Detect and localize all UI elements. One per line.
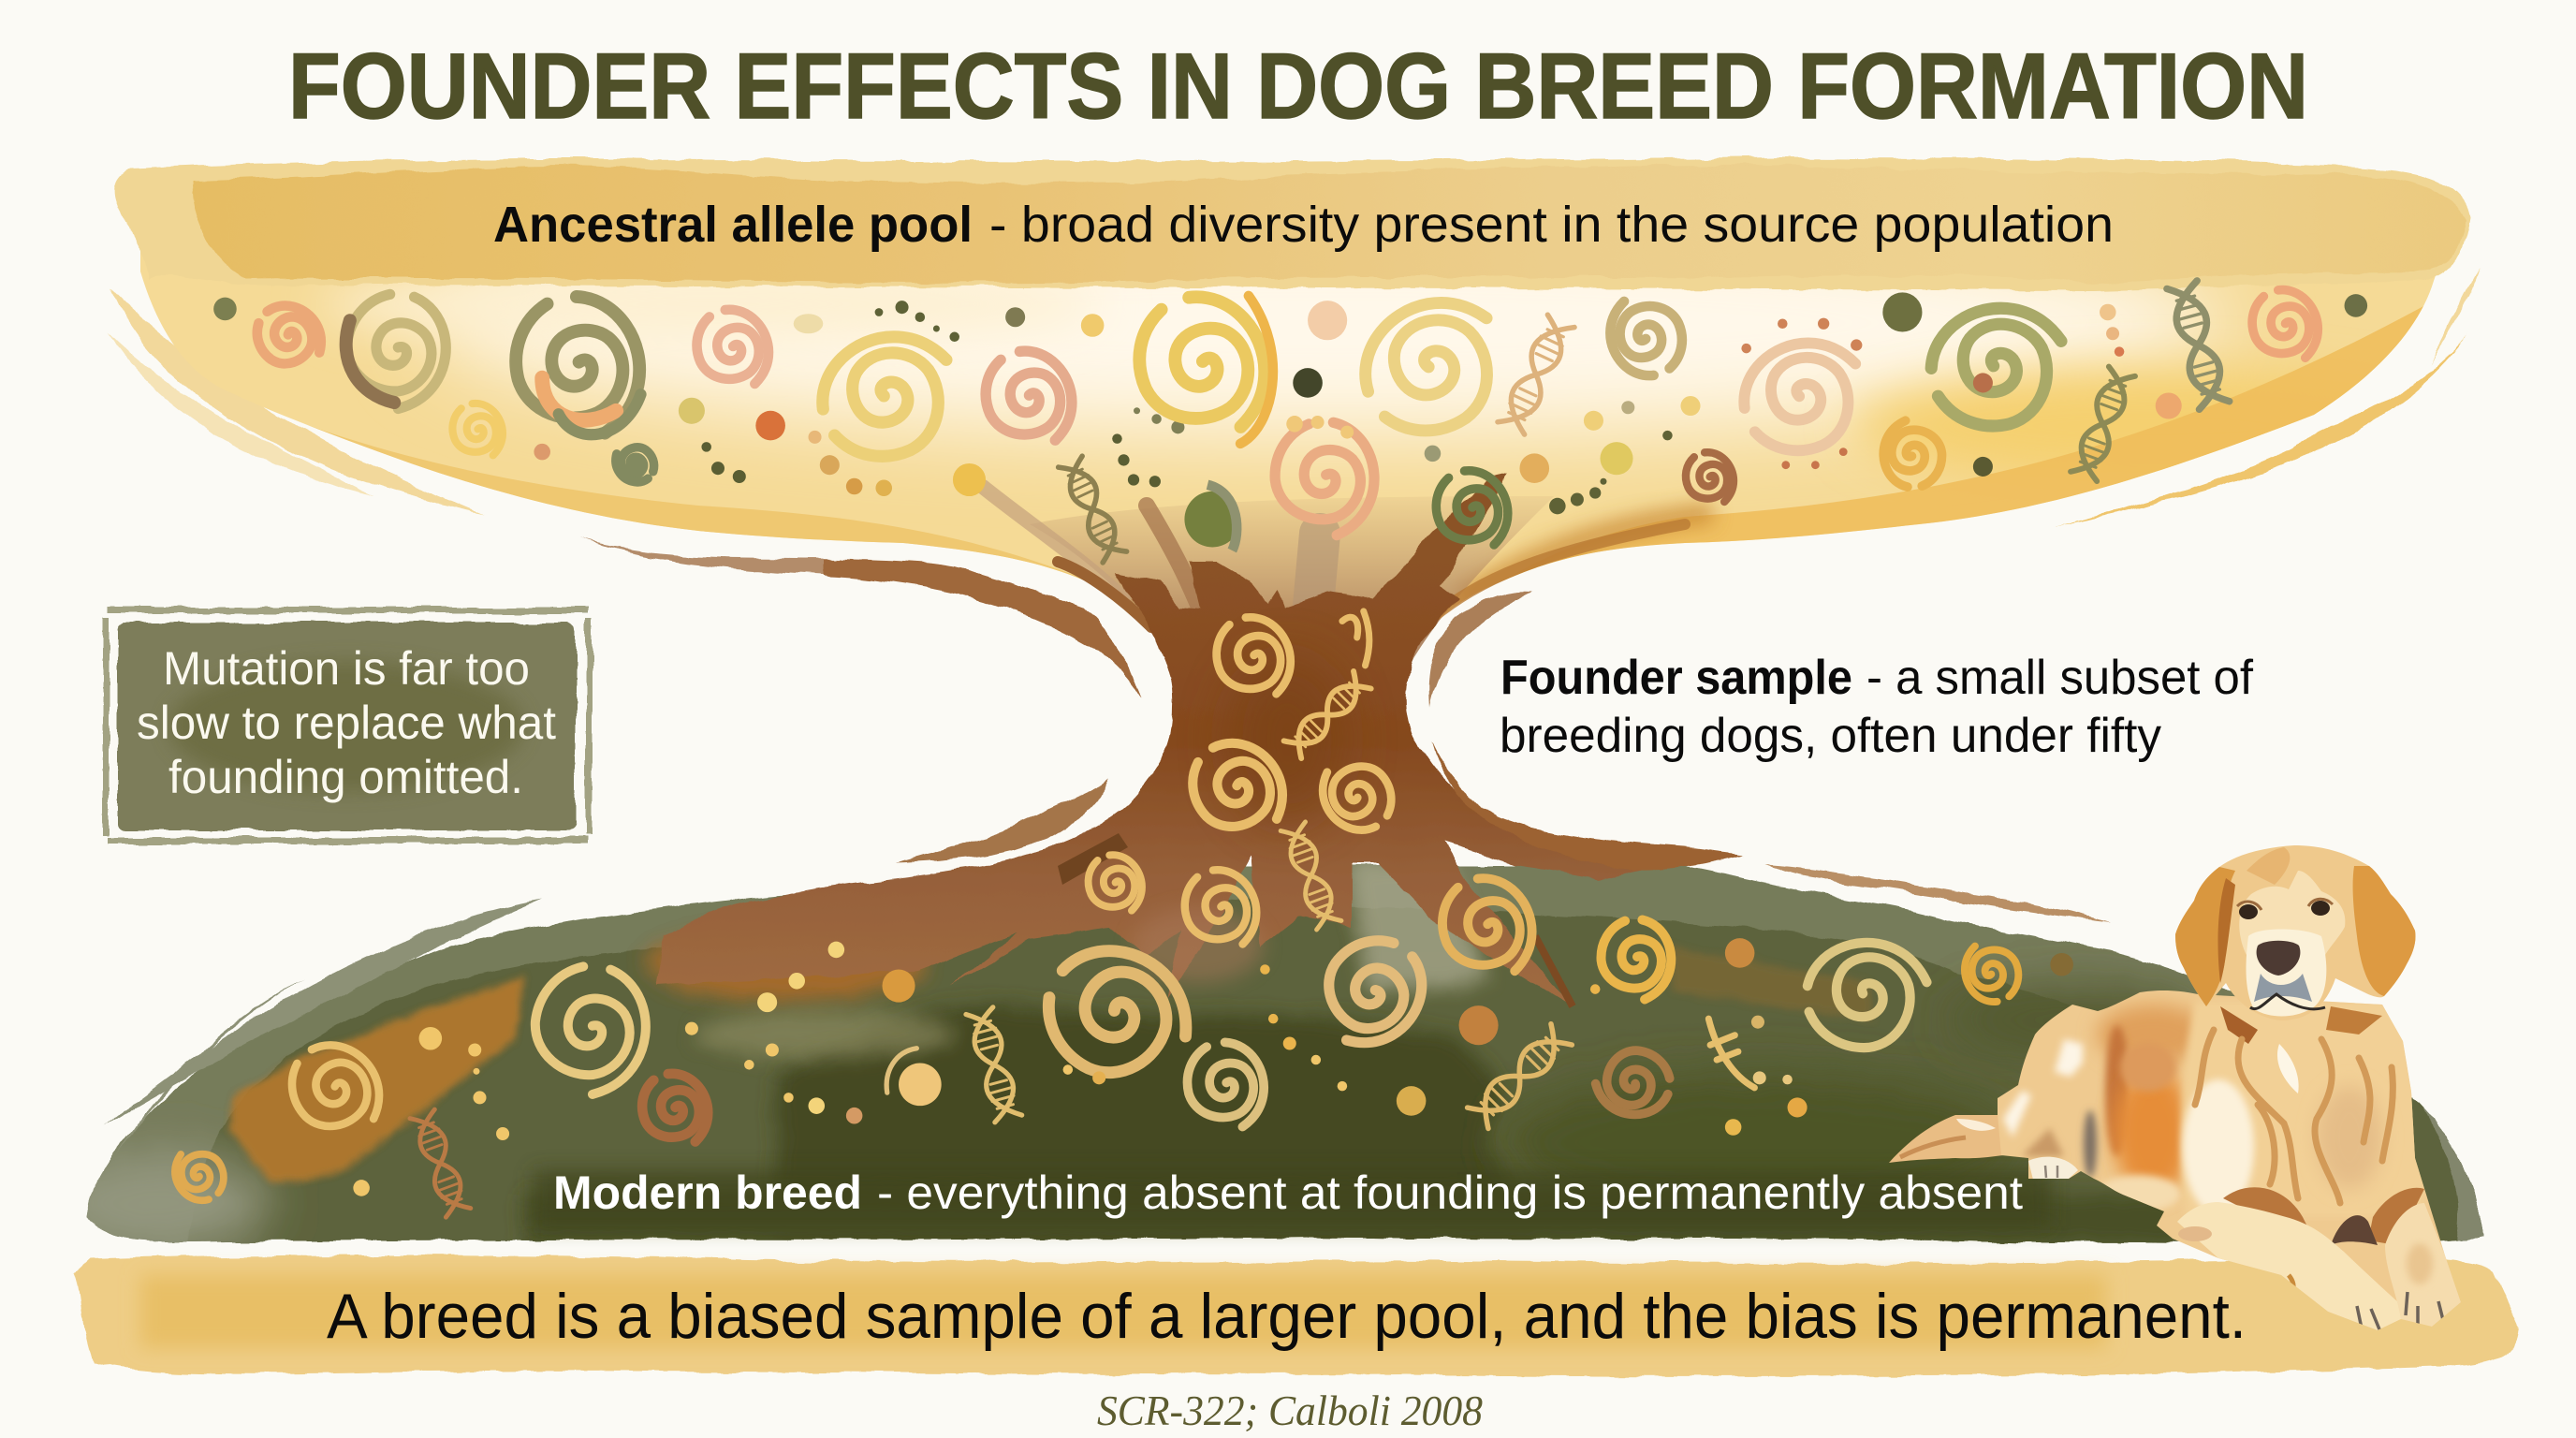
- top band outer pale wash: [114, 157, 2470, 290]
- text: founder sample: - a small subset of: [1866, 651, 2254, 705]
- dark inner wash: [777, 1005, 1535, 1245]
- between-leg shadows: [2223, 1187, 2312, 1236]
- panel: bottom takeaway band: [74, 1255, 2520, 1376]
- heading: ancestral allele pool: [493, 197, 2114, 253]
- title: FOUNDER EFFECTS IN DOG BREED FORMATION: [288, 34, 2308, 138]
- tail: [1889, 1098, 2012, 1163]
- branch strokes in the pool: [983, 487, 1685, 637]
- brush strokes beside trunk: [578, 538, 2109, 923]
- pool body wash: [140, 252, 2436, 614]
- callout: mutation: [106, 610, 589, 841]
- nose: [2257, 941, 2300, 976]
- text: founder sample: [1500, 651, 2254, 763]
- upper pool motifs: [213, 276, 2367, 563]
- heading: ancestral allele pool: - broad diversity present in the source population: [989, 197, 2114, 253]
- pale wash into pool: [1030, 496, 1554, 674]
- mouth: [2250, 994, 2325, 1009]
- ochre wash on hill: [229, 976, 525, 1184]
- panel: founder bottleneck trunk: [578, 473, 2109, 1006]
- body: [1998, 990, 2461, 1330]
- hill motifs: [171, 910, 2073, 1217]
- heading: modern breed: - everything absent at founding is permanently absent: [877, 1167, 2023, 1219]
- trunk motifs: [1089, 611, 1532, 971]
- pale smear below root: [693, 1010, 955, 1059]
- panel: modern breed hill: [86, 863, 2484, 1244]
- callout: mutation: slow to replace what: [137, 697, 556, 749]
- motifs: allele spirals, dots and DNA: [171, 276, 2367, 1217]
- top band wash: [192, 165, 2466, 283]
- flank colour: [2097, 1005, 2209, 1064]
- pale wedge between roots: [1348, 861, 1488, 992]
- ears and head: [2175, 845, 2416, 1020]
- stray yellow brush strokes beside the pool: [108, 269, 2479, 527]
- mane and chest: [2181, 1002, 2424, 1217]
- trunk body: [655, 473, 1657, 1005]
- heading: modern breed: Modern breed: [553, 1167, 862, 1219]
- eyes: [2239, 901, 2330, 919]
- citation: SCR-322; Calboli 2008: [1097, 1387, 1483, 1434]
- orange root wash on hill: [646, 927, 927, 1002]
- callout: mutation: founding omitted.: [168, 751, 523, 803]
- stray olive brush strokes beside the hill: [103, 900, 542, 1156]
- callout: mutation: Mutation is far too: [163, 642, 530, 695]
- heading: ancestral allele pool: Ancestral allele pool: [493, 197, 973, 253]
- heading: modern breed: [534, 1167, 2050, 1226]
- trunk shading: [1058, 655, 1573, 1006]
- text: founder sample: Founder sample: [1500, 651, 1852, 705]
- panel: ancestral allele pool: [94, 157, 2490, 674]
- illustration: golden retriever: [1889, 845, 2481, 1348]
- takeaway text: A breed is a biased sample of a larger pool, and the bias is permanent.: [327, 1281, 2247, 1352]
- rear paw: [2028, 1157, 2078, 1180]
- text: founder sample: breeding dogs, often under fifty: [1500, 709, 2161, 763]
- front legs: [2177, 1202, 2401, 1330]
